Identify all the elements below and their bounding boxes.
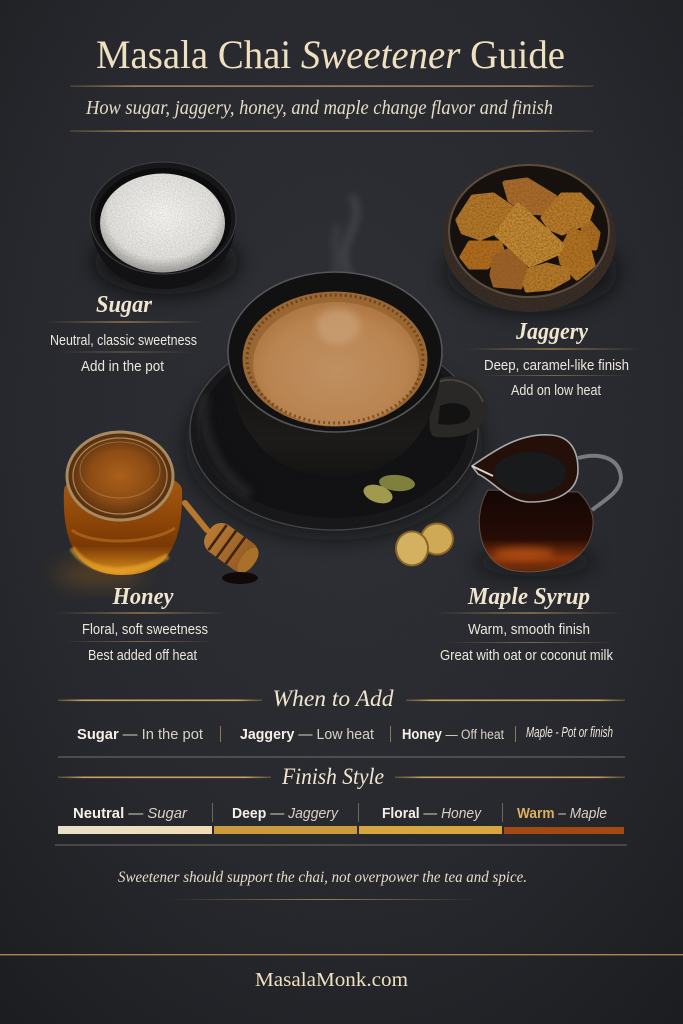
illustration: saucer bbox=[186, 332, 482, 540]
timing: sugar: Sugar — In the pot bbox=[77, 727, 203, 743]
sugar label: Neutral, classic sweetness bbox=[50, 333, 197, 349]
maple syrup label: Great with oat or coconut milk bbox=[440, 648, 614, 664]
maple syrup label: Warm, smooth finish bbox=[468, 622, 590, 638]
honey label: Best added off heat bbox=[88, 648, 197, 664]
illustration: steam bbox=[333, 195, 356, 315]
chai surface bbox=[242, 292, 428, 426]
title: Masala Chai Sweetener Guide bbox=[96, 32, 565, 77]
sugar label: Sugar bbox=[96, 292, 153, 318]
honey label bbox=[55, 584, 228, 664]
illustration: sugar bowl bbox=[90, 162, 238, 294]
illustration: cardamom pods bbox=[361, 473, 416, 507]
jaggery label: Jaggery bbox=[515, 319, 588, 345]
maple syrup label: Maple Syrup bbox=[467, 584, 590, 610]
illustration: ginger slices bbox=[395, 522, 454, 566]
sugar label: Add in the pot bbox=[81, 359, 164, 375]
subtitle rule bbox=[70, 130, 593, 132]
heading: finish style: Finish Style bbox=[281, 764, 384, 789]
illustration: honey dipper bbox=[185, 503, 264, 584]
timing: maple: Maple - Pot or finish bbox=[526, 725, 613, 741]
heading: when to add: When to Add bbox=[272, 686, 394, 711]
jug handle bbox=[578, 456, 621, 510]
maple syrup label bbox=[435, 584, 622, 664]
jaggery label: Add on low heat bbox=[511, 383, 601, 399]
finish: floral: Floral — Honey bbox=[382, 806, 482, 822]
honey label: Floral, soft sweetness bbox=[82, 622, 208, 638]
finish: neutral: Neutral — Sugar bbox=[73, 806, 188, 822]
subtitle: How sugar, jaggery, honey, and maple change flavor and finish bbox=[85, 97, 553, 119]
finish colour bars bbox=[58, 826, 624, 834]
timing: honey: Honey — Off heat bbox=[402, 727, 504, 743]
finish: deep: Deep — Jaggery bbox=[232, 806, 339, 822]
sugar label bbox=[45, 292, 205, 375]
sugar crystals bbox=[100, 174, 225, 272]
illustration: honey jar bbox=[55, 432, 182, 586]
finish: warm: Warm – Maple bbox=[517, 806, 607, 822]
illustration: jaggery bowl bbox=[442, 163, 618, 312]
closing note: Sweetener should support the chai, not overpower the tea and spice. bbox=[118, 869, 527, 886]
jaggery pieces bbox=[458, 180, 598, 290]
timing: jaggery: Jaggery — Low heat bbox=[240, 727, 374, 743]
illustration: maple syrup jug bbox=[472, 435, 621, 576]
jaggery label: Deep, caramel-like finish bbox=[484, 358, 629, 374]
title rule top bbox=[70, 86, 593, 87]
jaggery label bbox=[465, 319, 640, 399]
section: finish style bbox=[58, 764, 625, 834]
illustration: chai cup bbox=[228, 272, 488, 476]
footer site name: MasalaMonk.com bbox=[255, 969, 408, 991]
cup handle bbox=[429, 377, 488, 437]
section: when to add bbox=[58, 686, 625, 743]
honey label: Honey bbox=[112, 584, 174, 610]
